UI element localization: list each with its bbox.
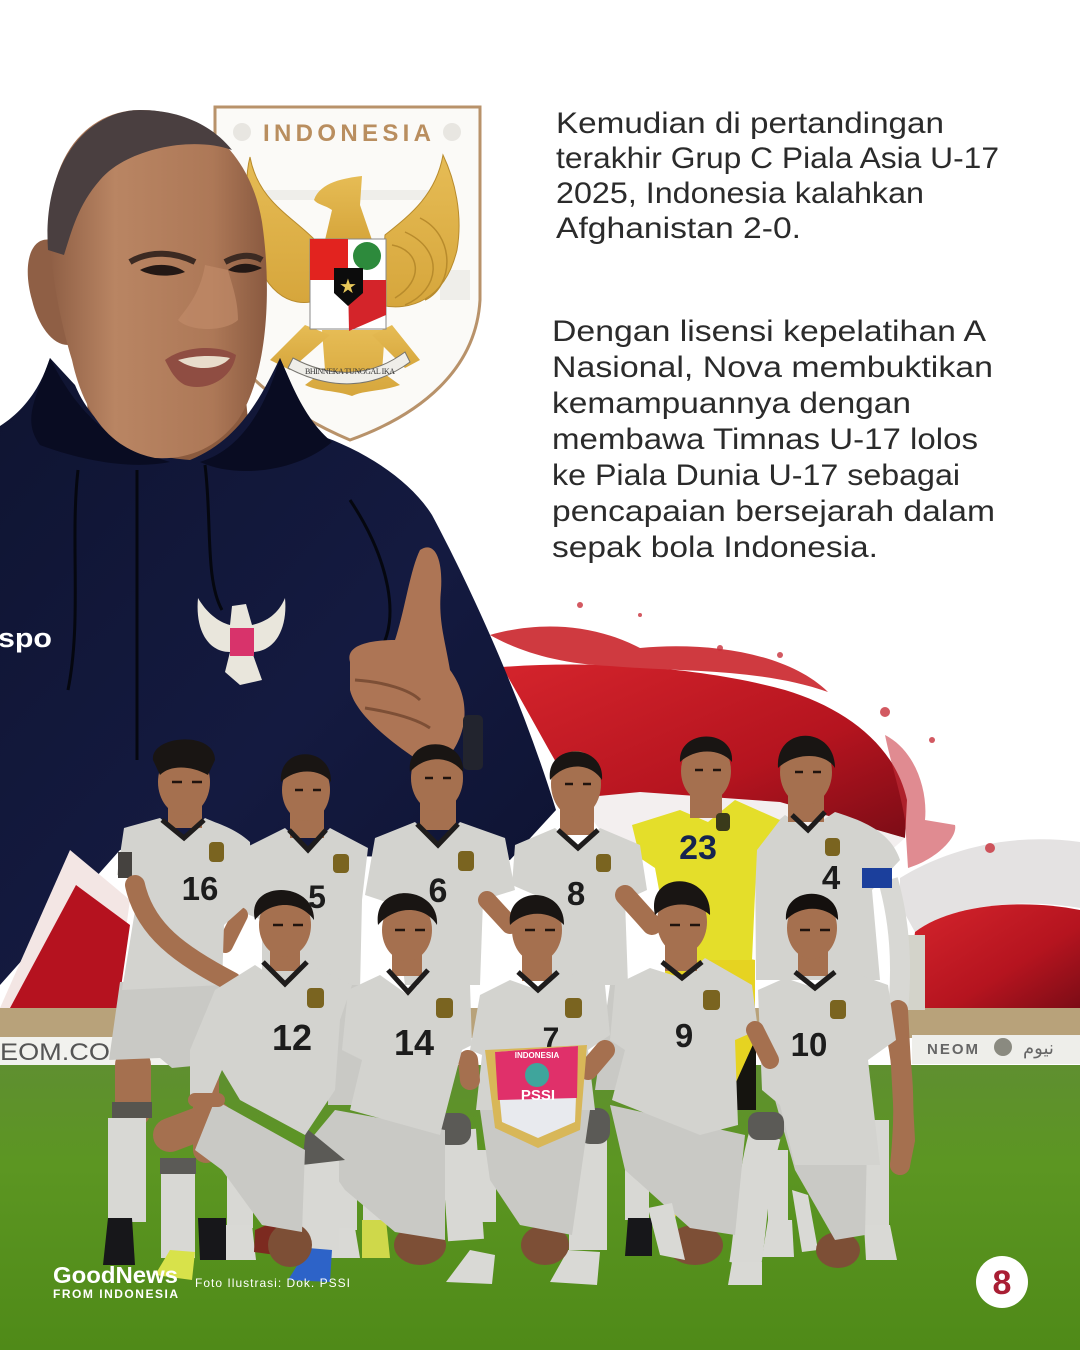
grass pitch: [0, 1065, 1080, 1350]
player 5: [225, 754, 368, 1105]
jacket hood shading: [31, 358, 332, 471]
player 9: 9: [675, 1017, 693, 1054]
text block: second paragraph: [552, 315, 995, 564]
motto ribbon: BHINNEKA TUNGGAL IKA: [305, 367, 395, 376]
text block: first paragraph: 2025, Indonesia kalahkan: [556, 177, 924, 210]
player 7: 7: [543, 1022, 559, 1055]
text block: second paragraph: Nasional, Nova membuktikan: [552, 351, 993, 384]
advertising board right: NEOM: [927, 1041, 980, 1058]
player 7: [435, 895, 610, 1284]
brand logo: GoodNews: [53, 1262, 178, 1288]
white flag lower band: [578, 792, 905, 860]
coach eyebrows: [130, 254, 262, 262]
page number badge: [976, 1256, 1028, 1308]
red flag main wave: [502, 665, 907, 838]
photo credit: Foto Ilustrasi: Dok. PSSI: [195, 1276, 350, 1290]
right red flag fold: [914, 904, 1080, 1008]
brand logo: FROM INDONESIA: [53, 1287, 178, 1301]
player 4: 4: [822, 859, 841, 896]
garuda wings: [247, 157, 318, 302]
player faces: [172, 770, 830, 930]
brand logo: [53, 1262, 178, 1301]
team photo: players: [103, 736, 905, 1285]
pennant: PSSI: [521, 1087, 555, 1104]
page number badge: 8: [993, 1264, 1011, 1302]
crest grey pattern: [233, 123, 470, 300]
coach mouth: [165, 348, 236, 387]
garuda shield: ★: [339, 274, 357, 298]
advertising board left: EOM.CO: [0, 1039, 110, 1066]
advertising board right: [912, 1035, 1080, 1064]
left red paper decoration: [0, 850, 130, 1008]
player 23 goalkeeper: 23: [679, 829, 717, 867]
text block: second paragraph: ke Piala Dunia U-17 sebagai: [552, 459, 960, 492]
text block: first paragraph: terakhir Grup C Piala Asia U-17: [556, 142, 999, 175]
wing feather lines: [392, 218, 447, 305]
coach head: [50, 110, 267, 458]
advertising board right: نيوم: [1023, 1038, 1054, 1059]
motto ribbon: [288, 352, 410, 384]
text block: first paragraph: Kemudian di pertandingan: [556, 107, 944, 140]
player 10: [728, 894, 903, 1285]
jacket garuda emblem: [198, 598, 285, 685]
text block: second paragraph: membawa Timnas U-17 lolos: [552, 423, 978, 456]
red flag top streak: [490, 626, 828, 692]
coach ear: [28, 239, 68, 345]
text block: second paragraph: sepak bola Indonesia.: [552, 531, 878, 564]
pennant: [485, 1045, 587, 1148]
player 4: [755, 736, 905, 1260]
back row legs and boots: [198, 1040, 818, 1260]
coach hand pointing: [349, 547, 465, 758]
coach jacket: [0, 358, 556, 985]
advertising board left: [0, 1037, 175, 1066]
coach nose: [178, 265, 238, 329]
hand finger creases: [355, 680, 430, 728]
pennant: INDONESIA: [515, 1051, 559, 1060]
garuda head and body: [314, 176, 372, 240]
player 6: [365, 744, 515, 985]
crest heading: INDONESIA: [263, 120, 431, 147]
coach watch: [463, 715, 483, 770]
text block: first paragraph: Afghanistan 2-0.: [556, 212, 801, 245]
coach eyes: [140, 264, 262, 276]
coach hair: [47, 110, 232, 255]
player 6: 6: [429, 872, 447, 910]
text block: second paragraph: Dengan lisensi kepelatihan A: [552, 315, 986, 348]
player 5: 5: [308, 879, 326, 915]
stadium stands: [0, 935, 1080, 1066]
player 9: [550, 881, 770, 1285]
player 14: 14: [394, 1022, 434, 1063]
right grey flag streak: [900, 839, 1080, 932]
player 14: [288, 893, 472, 1282]
text block: second paragraph: kemampuannya dengan: [552, 387, 911, 420]
player 12: 12: [272, 1017, 312, 1058]
flag splash background: [490, 602, 1080, 1008]
player 8: 8: [567, 875, 585, 912]
player 16: [103, 739, 252, 1265]
text block: first paragraph: [556, 107, 999, 245]
garuda shield: [310, 239, 386, 331]
player 10: 10: [791, 1026, 827, 1063]
crest: Indonesia shield: [215, 107, 480, 440]
player 16: 16: [182, 870, 218, 907]
text block: second paragraph: pencapaian bersejarah dalam: [552, 495, 995, 528]
player 12: [155, 890, 352, 1280]
jacket zip and cords: [68, 465, 390, 760]
coach figure: [0, 110, 556, 985]
coach neck: [80, 340, 250, 470]
paint splatter: [577, 602, 995, 868]
player 8: [512, 751, 652, 1090]
player 23 goalkeeper: [632, 736, 780, 1240]
